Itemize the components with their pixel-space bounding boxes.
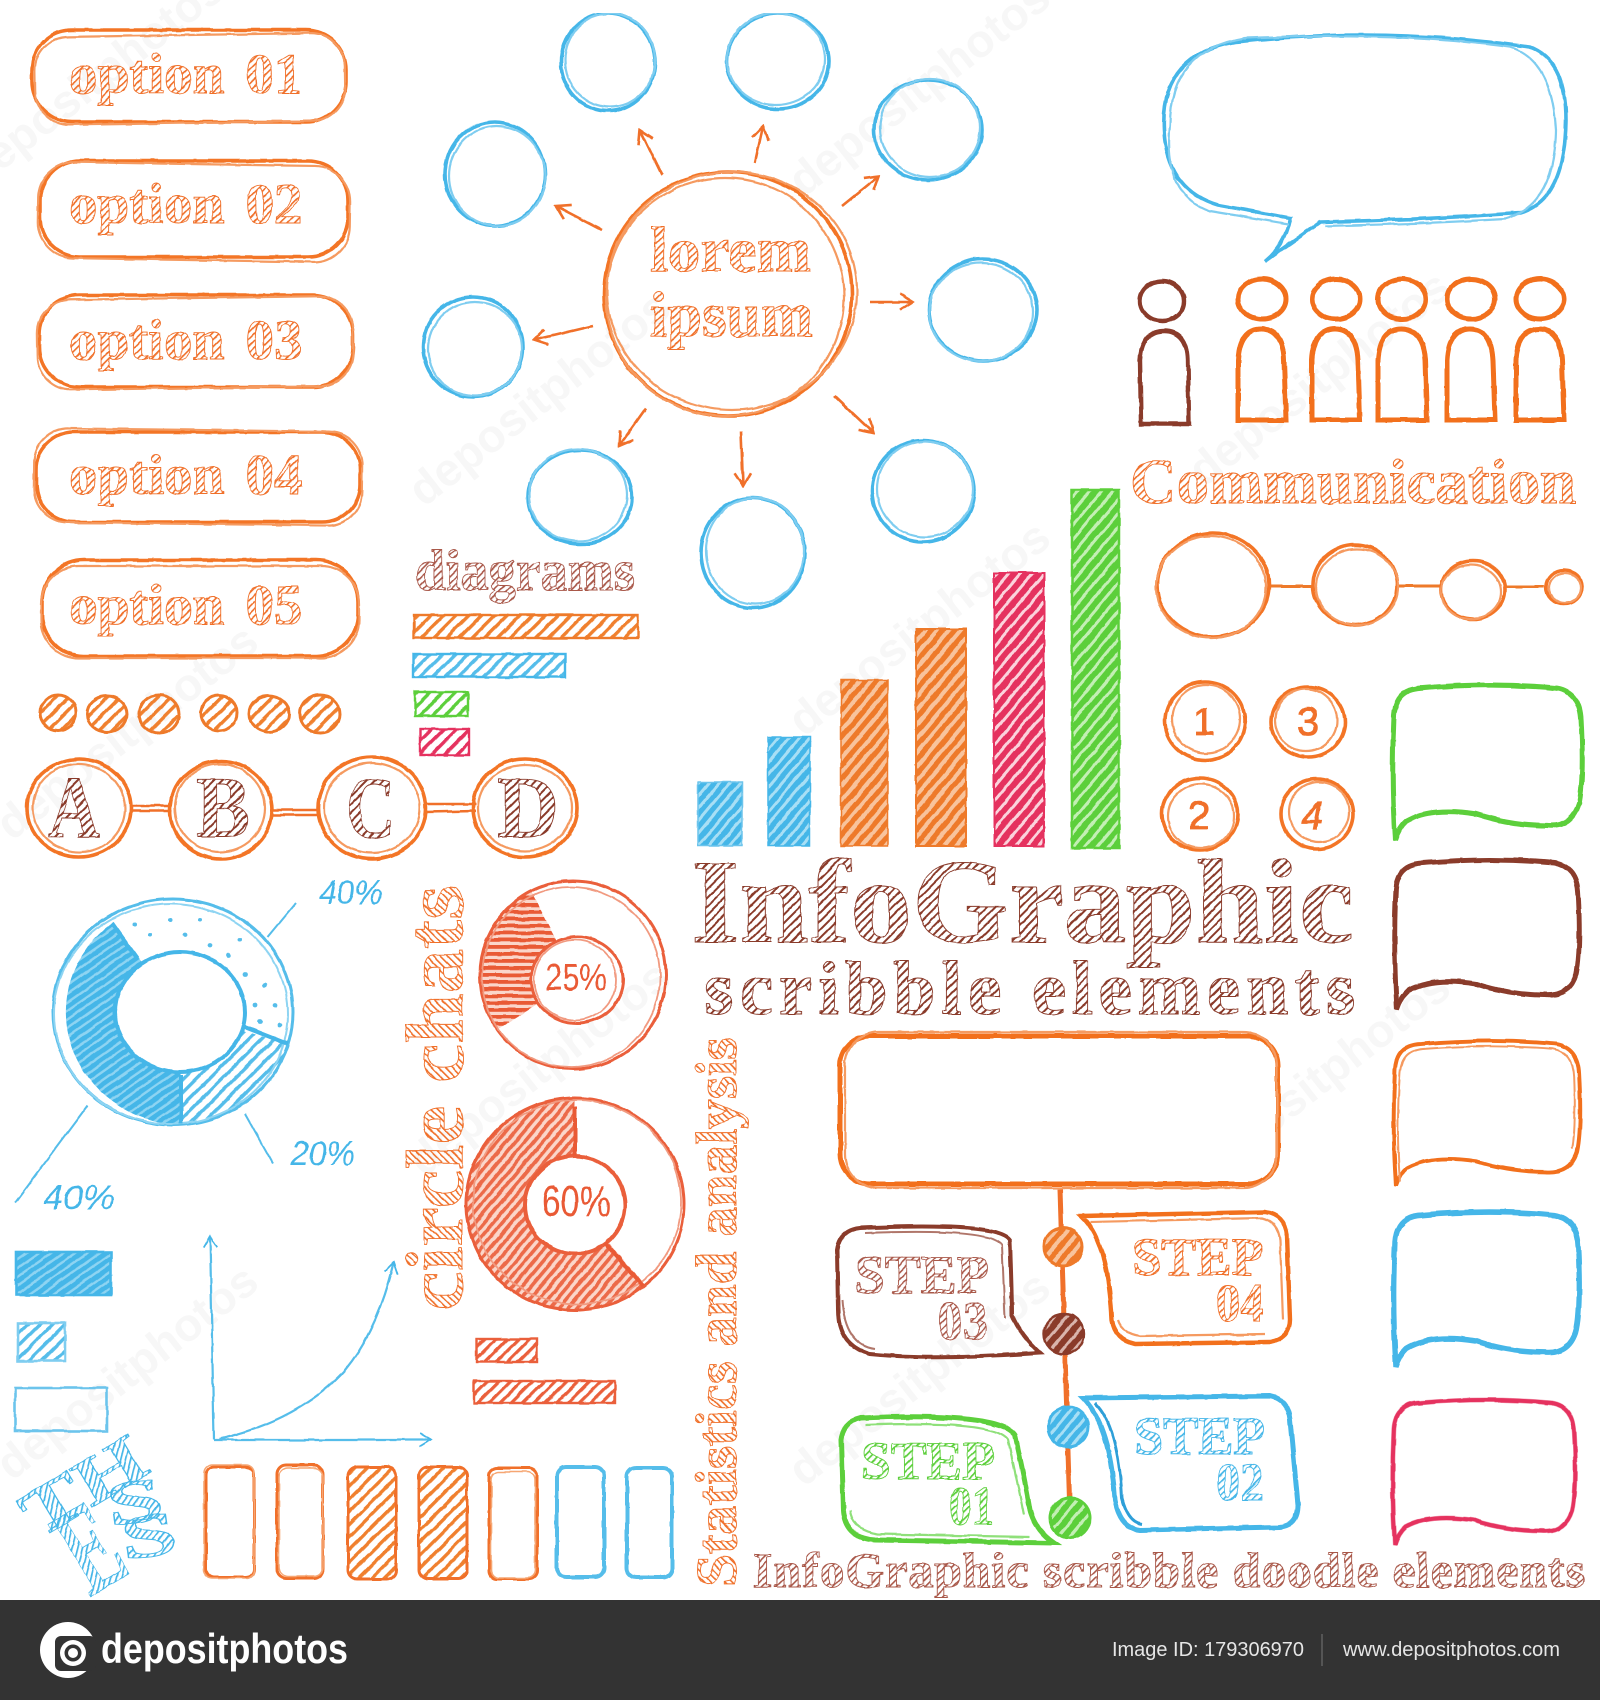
mind map hub: lorem ipsum: ipsum bbox=[650, 280, 813, 350]
callout: STEP 02 bbox=[1083, 1396, 1298, 1530]
large rounded panel with connector bbox=[840, 1032, 1278, 1517]
callout: STEP 01 bbox=[841, 1417, 1054, 1543]
donut legend swatches bbox=[15, 1252, 111, 1431]
mind map satellite circles bbox=[423, 13, 1037, 608]
text: depositphotos bbox=[778, 1260, 1060, 1496]
speech box: blue bbox=[1394, 1212, 1579, 1367]
numbered circles 1 to 4: 2 bbox=[1188, 794, 1210, 838]
option button 02: option 02 bbox=[69, 173, 302, 236]
timeline dot: step 03 bbox=[1044, 1314, 1084, 1354]
option button 03 bbox=[36, 295, 354, 390]
numbered circles 1 to 4: 1 bbox=[1193, 700, 1215, 744]
A B C D linked circles: B bbox=[196, 760, 250, 857]
option button 05: option 05 bbox=[69, 574, 302, 637]
people icons bbox=[1140, 279, 1564, 424]
callout: STEP 01: STEP bbox=[861, 1431, 995, 1491]
hatched bar chart bbox=[698, 490, 1119, 848]
option button 01: option 01 bbox=[69, 43, 302, 106]
image id: Image ID: 179306970 bbox=[1112, 1639, 1304, 1661]
chain of shrinking circles bbox=[1156, 533, 1582, 638]
callout: STEP 03 bbox=[837, 1226, 1040, 1357]
red hatched bars bbox=[474, 1339, 615, 1403]
subtitle: scribble elements: scribble elements bbox=[704, 947, 1355, 1031]
pie chart 60% bbox=[465, 1097, 684, 1311]
THESES lettering: TH bbox=[7, 1419, 160, 1553]
speech box: green bbox=[1393, 685, 1582, 840]
website url: www.depositphotos.com bbox=[1342, 1639, 1560, 1661]
option button 02 bbox=[37, 161, 351, 263]
donut annotations: 40% bbox=[319, 874, 383, 912]
pie chart 25%: 25% bbox=[546, 957, 606, 999]
option button 03: option 03 bbox=[69, 309, 302, 372]
callout: STEP 01: 01 bbox=[949, 1476, 994, 1536]
blue donut chart bbox=[53, 899, 293, 1125]
numbered circles 1 to 4: 4 bbox=[1301, 794, 1323, 838]
donut annotations: 20% bbox=[290, 1135, 355, 1173]
timeline dot: step 01 bbox=[1050, 1498, 1090, 1538]
THESES lettering: S bbox=[116, 1499, 181, 1574]
THESES lettering: E bbox=[31, 1474, 147, 1621]
timeline dot: step 04 bbox=[1044, 1228, 1082, 1266]
speech box: brown bbox=[1395, 860, 1579, 1009]
row of tall rounded rectangles bbox=[204, 1465, 672, 1579]
text: depositphotos bbox=[1178, 260, 1460, 496]
A B C D linked circles: D bbox=[497, 760, 559, 857]
callout: STEP 02: 02 bbox=[1216, 1452, 1264, 1512]
heading: diagrams: diagrams bbox=[415, 538, 635, 603]
pie chart 60%: 60% bbox=[542, 1177, 610, 1226]
vertical heading: Statistics and analysis: Statistics and analysis bbox=[684, 1037, 749, 1587]
donut annotations bbox=[15, 874, 383, 1217]
option button 01 bbox=[32, 30, 346, 125]
mind map hub: lorem ipsum bbox=[604, 172, 857, 416]
growth line chart bbox=[210, 1236, 431, 1440]
THESES lettering bbox=[7, 1419, 181, 1621]
mind map hub: lorem ipsum: lorem bbox=[650, 215, 811, 285]
depositphotos wordmark: depositphotos bbox=[101, 1625, 348, 1672]
row of scribbled dots bbox=[40, 695, 340, 733]
callout: STEP 04: 04 bbox=[1216, 1273, 1264, 1333]
speech box: orange bbox=[1394, 1041, 1580, 1186]
heading: Communication: Communication bbox=[1130, 446, 1576, 517]
text: depositphotos bbox=[398, 950, 680, 1186]
speech box: pink bbox=[1393, 1400, 1575, 1544]
callout: STEP 04: STEP bbox=[1132, 1227, 1264, 1287]
option button 05 bbox=[41, 560, 359, 658]
numbered circles 1 to 4 bbox=[1162, 682, 1353, 850]
callout: STEP 04 bbox=[1081, 1212, 1290, 1344]
speech bubble top right bbox=[1164, 35, 1566, 261]
title: InfoGraphic: InfoGraphic bbox=[691, 835, 1354, 968]
A B C D linked circles bbox=[27, 757, 577, 859]
text: depositphotos bbox=[1178, 960, 1460, 1196]
pie chart 25% bbox=[480, 881, 666, 1069]
timeline dot: step 02 bbox=[1048, 1407, 1088, 1447]
mind map arrows bbox=[534, 126, 913, 486]
small horizontal hatched bars bbox=[413, 615, 638, 755]
vertical heading: circle chats: circle chats bbox=[389, 885, 480, 1311]
donut annotations: 40% bbox=[43, 1179, 115, 1217]
text: depositphotos bbox=[398, 280, 680, 516]
A B C D linked circles: A bbox=[48, 760, 100, 857]
icon: depositphotos camera logo bbox=[40, 1622, 96, 1678]
option button 04: option 04 bbox=[69, 444, 302, 507]
caption: InfoGraphic scribble doodle elements: InfoGraphic scribble doodle elements bbox=[753, 1542, 1585, 1598]
callout: STEP 02: STEP bbox=[1134, 1406, 1265, 1466]
THESES lettering: S bbox=[102, 1465, 167, 1540]
footer band bbox=[0, 1600, 1600, 1700]
callout: STEP 03: 03 bbox=[937, 1291, 988, 1351]
callout: STEP 03: STEP bbox=[855, 1245, 989, 1305]
text: depositphotos bbox=[778, 510, 1060, 746]
A B C D linked circles: C bbox=[346, 760, 395, 857]
numbered circles 1 to 4: 3 bbox=[1297, 700, 1319, 744]
option button 04 bbox=[33, 428, 363, 526]
